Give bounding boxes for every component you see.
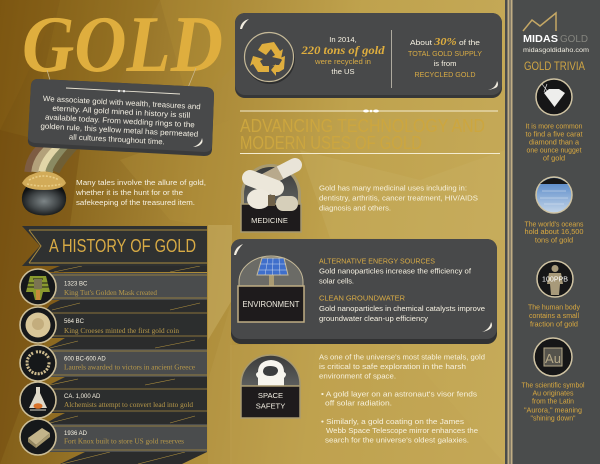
text: medicine: diagnosis and others. [319, 204, 391, 212]
text: medicine: dentistry, arthritis, cancer treatment, HIV/AIDS [319, 194, 478, 202]
heading: modern uses of gold: ADVANCING TECHNOLOGY AND [240, 116, 485, 136]
stat: 220 tons: In 2014, [329, 35, 357, 44]
trivia: diamond: of gold [543, 154, 565, 162]
heading: modern uses of gold: MODERN USES OF GOLD [240, 133, 422, 153]
stat: 30 percent: TOTAL GOLD SUPPLY [408, 49, 482, 58]
icon: golden mask [20, 269, 56, 305]
text: environment: solar cells. [319, 276, 354, 286]
timeline row: ca. 1000 AD: Alchemists attempt to convert lead into gold [64, 401, 194, 409]
icon: gold coin [20, 307, 56, 343]
timeline row: 1936 AD: 1936 AD [64, 431, 88, 437]
timeline row: 1936 AD [20, 419, 207, 455]
icon: space safety: SPACE [258, 391, 283, 400]
panel: environment [231, 239, 497, 344]
intro panel: eternity. All gold mined in history is still [52, 104, 191, 120]
intro panel: available today. From wedding rings to the [45, 112, 195, 129]
text: space safety [319, 352, 485, 444]
intro panel: golden rule, this yellow metal has permeated [40, 121, 198, 139]
text: environment: CLEAN GROUNDWATER [319, 294, 405, 302]
timeline row: 1323 BC: King Tut's Golden Mask created [64, 289, 158, 297]
trivia: human body [528, 261, 580, 328]
text: environment [319, 256, 485, 323]
text: space safety: • A gold layer on an astronaut's visor fends [321, 390, 477, 398]
timeline row: 1323 BC [20, 269, 207, 305]
text: environment: groundwater clean-up efficiency [319, 314, 428, 323]
stat: 220 tons: the US [331, 67, 355, 76]
trivia: au symbol: The scientific symbol [522, 380, 585, 390]
timeline row: 1323 BC: 1323 BC [64, 282, 88, 288]
trivia: ocean: tons of gold [535, 236, 573, 244]
timeline row: ca. 1000 AD [20, 382, 207, 418]
text: environment: Gold nanoparticles increase the efficiency of [319, 266, 472, 276]
icon: medicine [241, 164, 301, 232]
icon: rainbow [28, 138, 75, 172]
trivia: human body: 100PPB [542, 276, 568, 284]
heading: gold trivia: GOLD TRIVIA [524, 59, 585, 73]
intro panel: all cultures throughout time. [69, 132, 165, 146]
trivia: diamond: It is more common [526, 122, 582, 130]
icon: space safety: SAFETY [256, 402, 285, 410]
stat: 30 percent [408, 36, 482, 79]
history ribbons [45, 266, 207, 464]
trivia: ocean: The world's oceans [524, 220, 584, 228]
icon: pot of gold [22, 172, 66, 216]
timeline row: ca. 1000 AD: CA. 1,000 AD [64, 394, 101, 400]
intro panel [28, 68, 214, 156]
stat: 30 percent: RECYCLED GOLD [414, 70, 476, 79]
stat: 220 tons: were recycled in [314, 57, 371, 66]
trivia: au symbol: Au originates [532, 388, 574, 398]
icon: solar panel: ENVIRONMENT [242, 300, 300, 309]
logo: midas gold: midasgoldidaho.com [523, 47, 590, 54]
stat: 30 percent: About 30% of the [410, 36, 480, 48]
timeline row: laurels: Laurels awarded to victors in ancient Greece [64, 364, 195, 372]
trivia: au symbol: "Aurora," meaning [524, 406, 582, 414]
text: medicine [319, 184, 478, 212]
text: allure of gold: safekeeping of the treasured item. [76, 198, 195, 207]
timeline row: laurels: 600 BC-600 AD [64, 356, 106, 362]
logo: midas gold [523, 13, 590, 54]
stat: 30 percent: is from [434, 59, 456, 68]
intro panel: We associate gold with wealth, treasures and [43, 94, 201, 111]
banner: a history of gold: A HISTORY OF GOLD [49, 236, 196, 256]
text: space safety: off solar radiation. [325, 398, 392, 408]
icon: gold bar [20, 419, 56, 455]
text: space safety: • Similarly, a gold coating on the James [321, 417, 464, 426]
trivia: diamond: to find a five carat [526, 130, 582, 138]
trivia: au symbol: Au [545, 351, 561, 366]
logo: midas gold: GOLD [560, 34, 588, 45]
icon: solar panel [238, 256, 304, 322]
text: space safety: search for the universe's oldest galaxies. [325, 436, 469, 444]
trivia: au symbol: "shining down" [530, 414, 576, 422]
text: space safety: Webb Space Telescope mirror enhances the [326, 426, 478, 435]
icon: medicine: MEDICINE [251, 216, 288, 225]
text: environment: ALTERNATIVE ENERGY SOURCES [319, 256, 435, 266]
banner: a history of gold [22, 226, 207, 266]
trivia: diamond [526, 79, 582, 162]
text: environment: Gold nanoparticles in chemical catalysts improve [319, 304, 485, 313]
text: allure of gold: whether it is the hunt for or the [75, 188, 183, 197]
stat: 220 tons: 220 tons of gold [300, 45, 385, 57]
trivia: human body: fraction of gold [530, 320, 578, 328]
sidebar: gold trivia [505, 0, 600, 464]
text: space safety: environment of space. [319, 372, 396, 380]
timeline row: laurels [20, 345, 207, 381]
text: allure of gold [75, 178, 206, 207]
trivia: au symbol [522, 338, 585, 422]
heading: modern uses of gold [240, 116, 485, 153]
logo: midas gold: MIDAS [523, 34, 558, 45]
trivia: diamond: one ounce nugget [526, 146, 582, 154]
text: medicine: Gold has many medicinal uses including in: [319, 184, 467, 192]
trivia: ocean [524, 177, 584, 244]
icon: recycle [244, 32, 295, 84]
timeline row: 564 BC: King Croeses minted the first gold coin [64, 327, 180, 335]
divider [240, 110, 498, 112]
text: allure of gold: Many tales involve the allure of gold, [76, 178, 206, 187]
timeline row: 564 BC: 564 BC [64, 319, 85, 325]
title: GOLD: GOLD [22, 1, 223, 89]
trivia: ocean: hold about 16,500 [524, 227, 584, 236]
text: space safety: As one of the universe's most stable metals, gold [319, 352, 485, 362]
trivia: human body: The human body [528, 302, 580, 312]
stat: 220 tons [300, 35, 385, 76]
timeline row: 1936 AD: Fort Knox built to store US gold reserves [64, 438, 184, 446]
text: space safety: is critical to safe exploration in the harsh [319, 362, 466, 371]
timeline row: 564 BC [20, 307, 207, 343]
icon: alchemy flask [20, 382, 56, 418]
icon: laurel wreath [20, 345, 56, 381]
trivia: au symbol: from the Latin [532, 396, 574, 406]
trivia: diamond: diamond than a [529, 138, 580, 146]
trivia: human body: contains a small [529, 311, 579, 320]
icon: space safety [241, 355, 300, 418]
panel: recycling stats [235, 13, 502, 98]
